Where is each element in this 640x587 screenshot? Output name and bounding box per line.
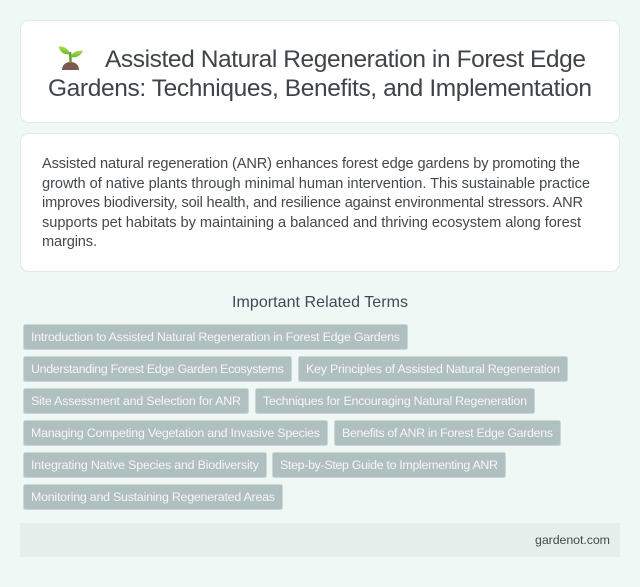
tag — [24, 388, 248, 414]
intro paragraph: growth of native plants through minimal human intervention. This sustainable practice — [42, 176, 590, 192]
intro paragraph: supports pet habitats by maintaining a balanced and thriving ecosystem along forest — [42, 215, 581, 231]
tag: Techniques for Encouraging Natural Regeneration — [263, 394, 527, 408]
title text: Gardens: Techniques, Benefits, and Implementation — [48, 75, 592, 102]
tag — [24, 420, 328, 446]
tag — [24, 452, 266, 478]
tag — [24, 324, 408, 350]
intro paragraph: improves biodiversity, soil health, and resilience against environmental stressors. ANR — [42, 195, 583, 211]
icon: seedling — [58, 46, 83, 70]
tag: Managing Competing Vegetation and Invasive Species — [31, 426, 320, 440]
intro paragraph: margins. — [42, 234, 97, 250]
tag: Site Assessment and Selection for ANR — [31, 394, 241, 408]
title panel — [20, 20, 620, 122]
tag — [256, 388, 534, 414]
heading: important related terms: Important Related Terms — [232, 294, 408, 311]
tag — [24, 484, 282, 510]
tag: Introduction to Assisted Natural Regeneration in Forest Edge Gardens — [31, 330, 400, 344]
intro paragraph — [42, 156, 590, 250]
panel: introduction — [20, 134, 620, 272]
tag — [24, 356, 292, 382]
tag: Step-by-Step Guide to Implementing ANR — [280, 458, 498, 472]
tag: Key Principles of Assisted Natural Regeneration — [306, 362, 560, 376]
title text — [48, 46, 592, 102]
tag: Understanding Forest Edge Garden Ecosystems — [31, 362, 284, 376]
tag: Benefits of ANR in Forest Edge Gardens — [342, 426, 553, 440]
footer source text: gardenot.com — [535, 533, 610, 547]
tag — [272, 452, 506, 478]
tag: Integrating Native Species and Biodiversity — [31, 458, 260, 472]
footer bar — [20, 523, 620, 557]
related terms tags — [24, 324, 568, 510]
tag: Monitoring and Sustaining Regenerated Areas — [31, 490, 275, 504]
title text: Assisted Natural Regeneration in Forest Edge — [105, 46, 586, 73]
tag — [334, 420, 560, 446]
tag — [298, 356, 568, 382]
intro paragraph: Assisted natural regeneration (ANR) enhances forest edge gardens by promoting the — [42, 156, 580, 172]
